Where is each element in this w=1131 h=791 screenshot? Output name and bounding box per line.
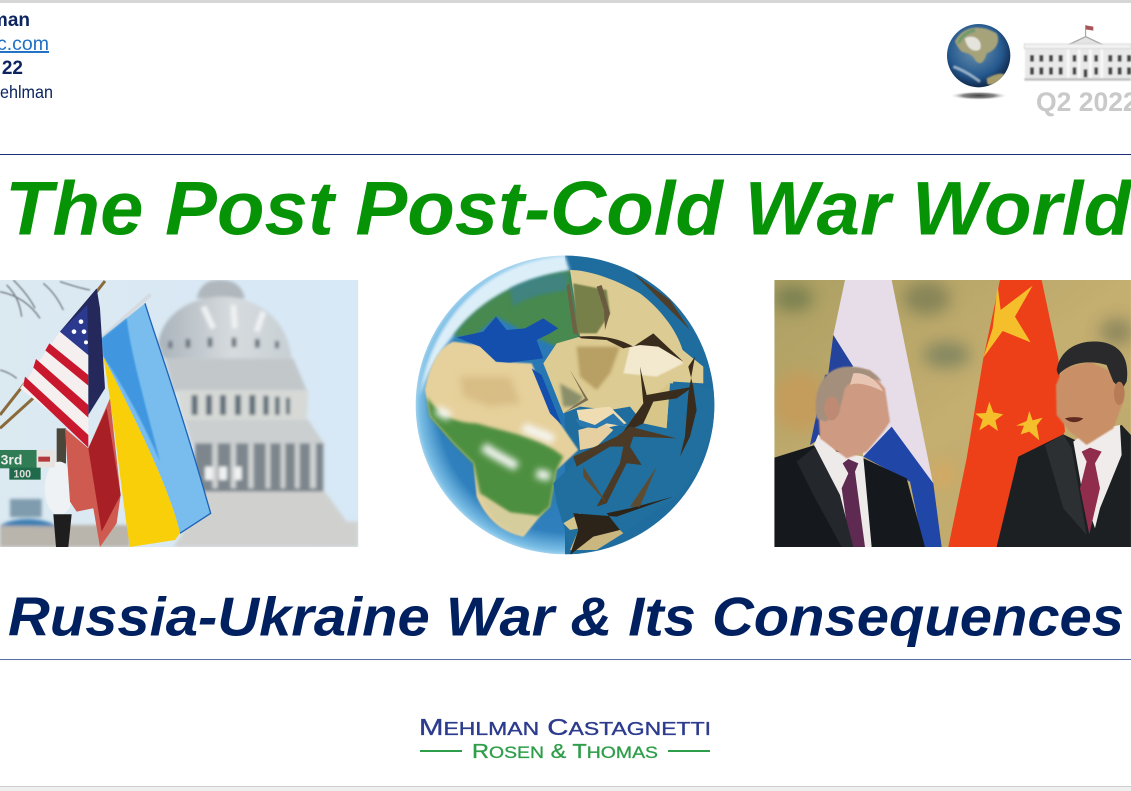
flag on roof [1084, 25, 1087, 37]
street signs [0, 450, 55, 480]
pediment [1066, 37, 1105, 46]
large star [983, 286, 1033, 358]
street lamp [45, 428, 74, 547]
Russian flag [810, 280, 942, 547]
title: The Post Post-Cold War World [5, 166, 1131, 252]
ocean [410, 250, 720, 560]
subtitle: Russia-Ukraine War & Its Consequences [8, 586, 1124, 648]
page frame bottom [0, 786, 1131, 791]
South land fragments [570, 528, 624, 550]
flag poles [0, 281, 105, 428]
Asia land [543, 270, 703, 427]
small stars [975, 402, 1003, 431]
street signs: 100 [13, 468, 31, 480]
cracks [563, 273, 697, 555]
Red Sea [532, 368, 562, 425]
Arabia [577, 407, 627, 430]
Capitol dome [158, 280, 358, 547]
building body [1024, 44, 1131, 81]
central Africa forest [427, 397, 563, 517]
tree branches [0, 280, 90, 378]
photo: US and Ukraine flags with Capitol [0, 280, 358, 547]
photo: cracked earth globe [410, 250, 720, 560]
contact details [0, 10, 53, 102]
atmosphere [419, 256, 570, 397]
contact handle: ehlman [0, 82, 53, 102]
Africa [425, 342, 578, 537]
logo firm names: M EHLMAN C ASTAGNETTI [419, 714, 711, 740]
globe shadow [949, 91, 1008, 100]
contact date: 22 [2, 58, 23, 79]
Gulf [575, 413, 627, 428]
American flag [20, 288, 121, 547]
India land [643, 382, 670, 428]
dark ocean right half [565, 255, 715, 555]
Mediterranean [457, 317, 558, 363]
cracked ocean [553, 383, 715, 557]
foreground buildings [0, 499, 130, 547]
logo rule right [668, 750, 710, 752]
icon: small earth globe [947, 24, 1010, 100]
divider top [0, 154, 1131, 155]
Ukrainian flag [102, 303, 211, 547]
tapestry background [774, 280, 1131, 547]
divider bottom [0, 659, 1131, 660]
Europe [453, 271, 580, 347]
logo second line: ROSEN & T HOMAS [472, 741, 658, 763]
Putin [774, 367, 925, 547]
logo [419, 714, 711, 763]
street signs: 3rd [1, 451, 22, 467]
icon: White House [1024, 25, 1131, 81]
clouds [437, 410, 553, 477]
photo: Putin and Xi with flags [773, 280, 1131, 547]
sky [0, 280, 358, 547]
Chinese flag [948, 280, 1065, 547]
Xi [997, 341, 1131, 547]
page frame top [0, 0, 1131, 3]
logo rule left [420, 750, 462, 752]
